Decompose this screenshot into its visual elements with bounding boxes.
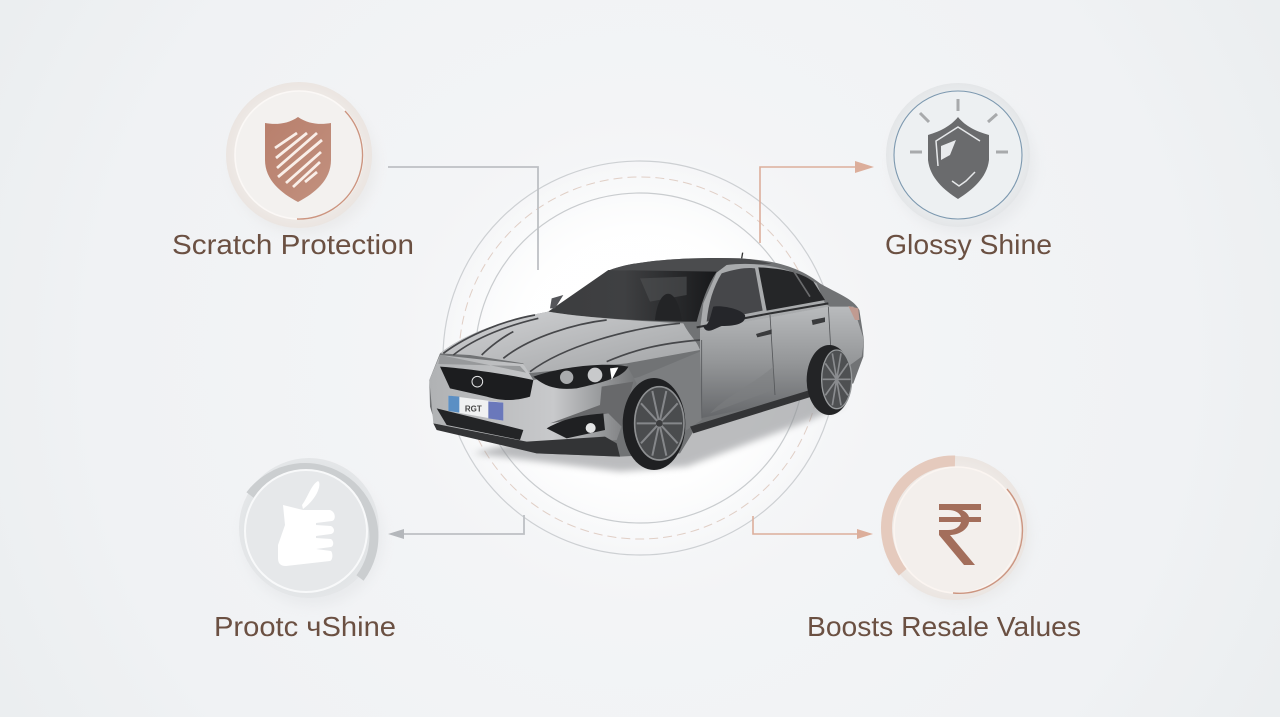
windshield <box>548 270 717 322</box>
front side window <box>707 268 763 322</box>
car body <box>429 258 864 457</box>
panel: glossy shine <box>885 83 1052 260</box>
front wheel <box>623 378 685 470</box>
arrow: resale value <box>753 516 873 539</box>
grille <box>440 367 533 400</box>
arrow: bottom left <box>388 515 524 539</box>
icon: light rays <box>910 99 1008 152</box>
headlight <box>533 365 628 389</box>
icon: rupee <box>939 504 981 565</box>
central rings <box>435 153 845 563</box>
license plate: RGT <box>465 405 482 414</box>
panel: scratch protection <box>172 82 414 260</box>
car shadow <box>473 387 843 472</box>
panel: thumbs up <box>214 458 396 642</box>
tail light <box>848 306 859 320</box>
door handles <box>756 317 825 337</box>
roof <box>610 258 772 273</box>
rear side window <box>758 267 825 311</box>
label: bottom left: Prootc чShine <box>214 611 396 642</box>
connector: scratch protection <box>388 167 538 270</box>
label: scratch protection: Scratch Protection <box>172 229 414 260</box>
side mirror <box>703 306 745 331</box>
icon: striped shield <box>265 117 331 202</box>
icon: thumbs up <box>278 481 335 566</box>
front bumper <box>429 355 637 447</box>
arrow: glossy shine <box>760 161 874 243</box>
fog lamp <box>547 413 605 438</box>
sill <box>690 390 812 433</box>
front splitter <box>433 423 620 457</box>
hood <box>440 312 700 373</box>
label: glossy shine: Glossy Shine <box>885 229 1052 260</box>
license plate <box>448 396 503 421</box>
logo <box>472 376 483 387</box>
label: resale value: Boosts Resale Values <box>807 611 1081 642</box>
fender <box>602 352 702 430</box>
icon: glossy shield <box>928 117 989 199</box>
door panels <box>700 307 864 418</box>
lower grille <box>437 408 523 440</box>
rear wheel <box>807 345 852 415</box>
car illustration <box>429 253 864 472</box>
panel: resale value <box>807 456 1081 642</box>
